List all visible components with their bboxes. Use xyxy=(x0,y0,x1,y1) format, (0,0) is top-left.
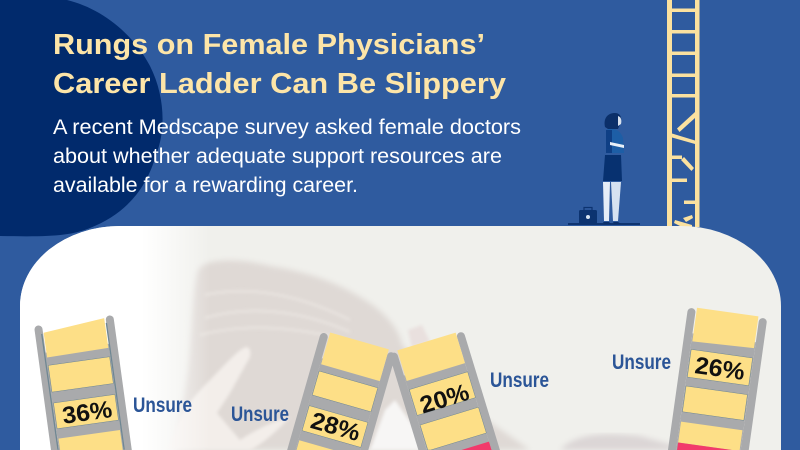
value: 36% xyxy=(61,396,114,430)
intro text: about whether adequate support resources are xyxy=(53,144,502,168)
intro text: A recent Medscape survey asked female doctors xyxy=(53,115,521,139)
photo: ear xyxy=(408,326,428,346)
value: 20% xyxy=(417,379,473,419)
icon: broken yellow ladder xyxy=(667,0,700,227)
label: unsure: Unsure xyxy=(612,351,671,374)
photo: hand xyxy=(178,347,287,450)
icon: woman looking up at ladder xyxy=(568,113,640,225)
title xyxy=(53,29,506,100)
title: Career Ladder Can Be Slippery xyxy=(53,68,506,100)
ladder: 20% xyxy=(390,332,500,450)
dark blue corner shape xyxy=(0,0,163,236)
intro text: available for a rewarding career. xyxy=(53,173,358,197)
value: 26% xyxy=(693,352,746,386)
title: Rungs on Female Physicians’ xyxy=(53,29,485,61)
value: 28% xyxy=(308,407,363,447)
photo: hair highlights xyxy=(200,291,350,340)
intro text xyxy=(53,115,521,197)
photo: pale collar xyxy=(370,400,418,450)
left fade xyxy=(20,226,196,450)
label: unsure: Unsure xyxy=(133,394,192,417)
photo: shoulder xyxy=(562,433,669,450)
label: unsure: Unsure xyxy=(231,403,289,426)
ladder: 28% xyxy=(287,333,395,450)
photo: hair xyxy=(175,260,530,450)
ladder: 36% xyxy=(35,315,132,450)
panel: survey card xyxy=(20,226,781,450)
ladder: 26% xyxy=(668,308,767,450)
label: unsure: Unsure xyxy=(490,369,549,392)
